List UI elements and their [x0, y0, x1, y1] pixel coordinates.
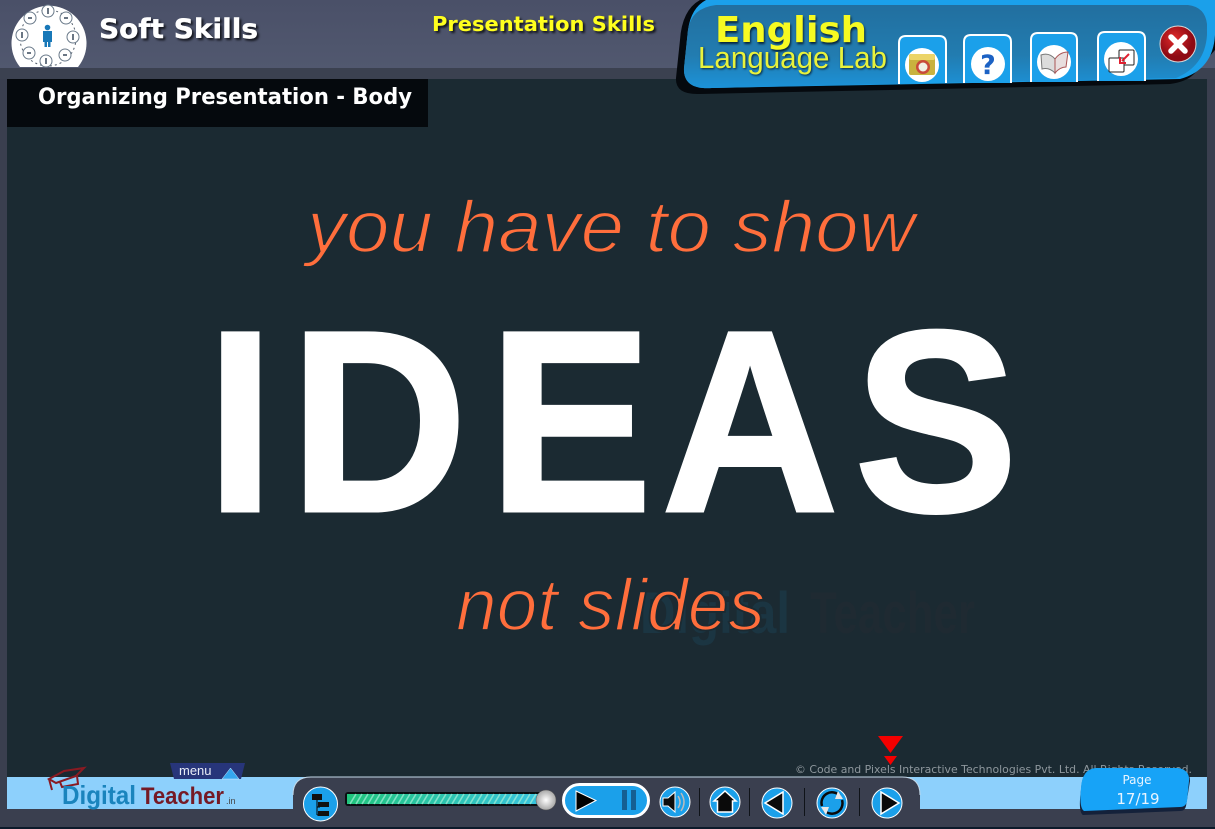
logo: Digital Teacher	[49, 768, 236, 810]
page counter: 17/19	[1116, 790, 1160, 808]
section title bar: Organizing Presentation - Body	[38, 85, 412, 110]
button: volume	[660, 787, 690, 817]
button: close	[1160, 26, 1196, 62]
heading: Soft Skills: Soft Skills	[99, 14, 258, 45]
text: IDEAS: IDEAS	[206, 276, 1018, 566]
button: help: ?	[980, 50, 996, 81]
progress bar	[345, 790, 556, 810]
panel: playback controls	[293, 777, 920, 827]
button: history folder	[899, 36, 946, 84]
text: you have to show: you have to show	[302, 187, 920, 268]
button: home	[710, 787, 740, 817]
section title bar	[7, 79, 428, 127]
top header bar	[0, 0, 1215, 68]
button: previous	[762, 788, 792, 818]
bottom light blue band	[7, 777, 1207, 809]
page counter: Page	[1122, 773, 1152, 787]
button: replay	[817, 788, 847, 818]
watermark: Digital Teacher	[640, 581, 975, 646]
icon: soft skills logo	[12, 5, 86, 67]
button: book	[1031, 33, 1077, 82]
button: help	[964, 35, 1011, 83]
panel: menu tab: menu	[179, 763, 212, 778]
logo: Digital Teacher: .in	[226, 796, 236, 806]
heading: Presentation Skills: Presentation Skills	[432, 12, 655, 36]
button: play and pause	[564, 784, 648, 816]
button: next	[872, 788, 902, 818]
panel: menu tab	[170, 763, 245, 779]
text: not slides: not slides	[456, 565, 765, 646]
page counter	[1080, 768, 1190, 815]
panel: English Language Lab toolbar	[676, 0, 1215, 94]
title: English: English	[715, 10, 867, 51]
button: table of contents	[304, 787, 338, 821]
copyright line: © Code and Pixels Interactive Technologies Pvt. Ltd. All Rights Reserved.	[795, 763, 1192, 776]
title: Language Lab: Language Lab	[698, 40, 887, 75]
watermark: Digital Teacher: Teacher	[810, 581, 975, 646]
logo: Digital Teacher: Digital	[62, 780, 136, 810]
button: resize window	[1098, 32, 1145, 81]
logo: Digital Teacher: Teacher	[141, 783, 224, 810]
watermark: Digital Teacher: Digital	[640, 581, 790, 646]
icon: red position marker	[878, 736, 903, 765]
